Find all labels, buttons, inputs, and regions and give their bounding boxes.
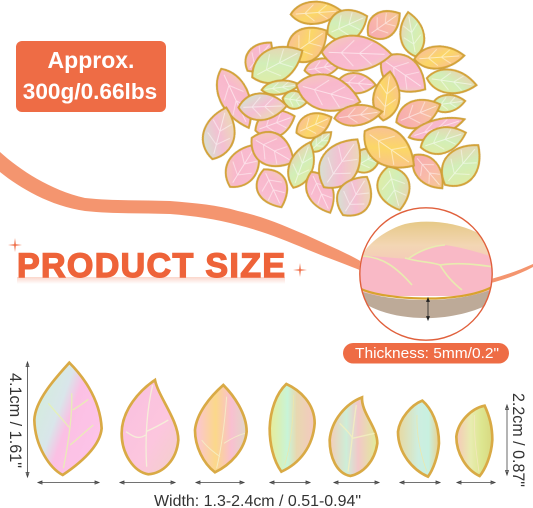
weight badge	[16, 41, 166, 112]
thickness label pill	[343, 343, 509, 364]
size leaf 2	[122, 380, 178, 474]
heading: product size: PRODUCT SIZE	[17, 247, 285, 285]
size leaf 4	[270, 384, 315, 472]
height arrow right	[506, 405, 508, 475]
size leaf 6	[398, 401, 439, 477]
decorative orange swoosh	[0, 152, 362, 271]
thickness arrow	[427, 298, 429, 320]
magnified thickness circle	[358, 207, 496, 341]
swoosh tail	[491, 264, 533, 283]
sparkle left	[8, 238, 22, 252]
weight badge: 300g/0.66lbs	[23, 79, 157, 104]
height label left: 4.1cm / 1.61"	[6, 373, 25, 468]
height label right: 2.2cm / 0.87"	[509, 393, 528, 487]
weight badge: Approx.	[48, 47, 134, 73]
thickness label pill: Thickness: 5mm/0.2"	[355, 346, 499, 362]
sparkle right	[293, 263, 307, 277]
leaf pile photo	[198, 0, 491, 224]
size leaf 1	[34, 363, 102, 475]
size leaf 3	[195, 385, 247, 472]
width arrows	[38, 481, 495, 484]
size leaf 7	[456, 406, 492, 476]
height arrow left	[26, 362, 29, 477]
size leaf 5	[330, 397, 377, 476]
